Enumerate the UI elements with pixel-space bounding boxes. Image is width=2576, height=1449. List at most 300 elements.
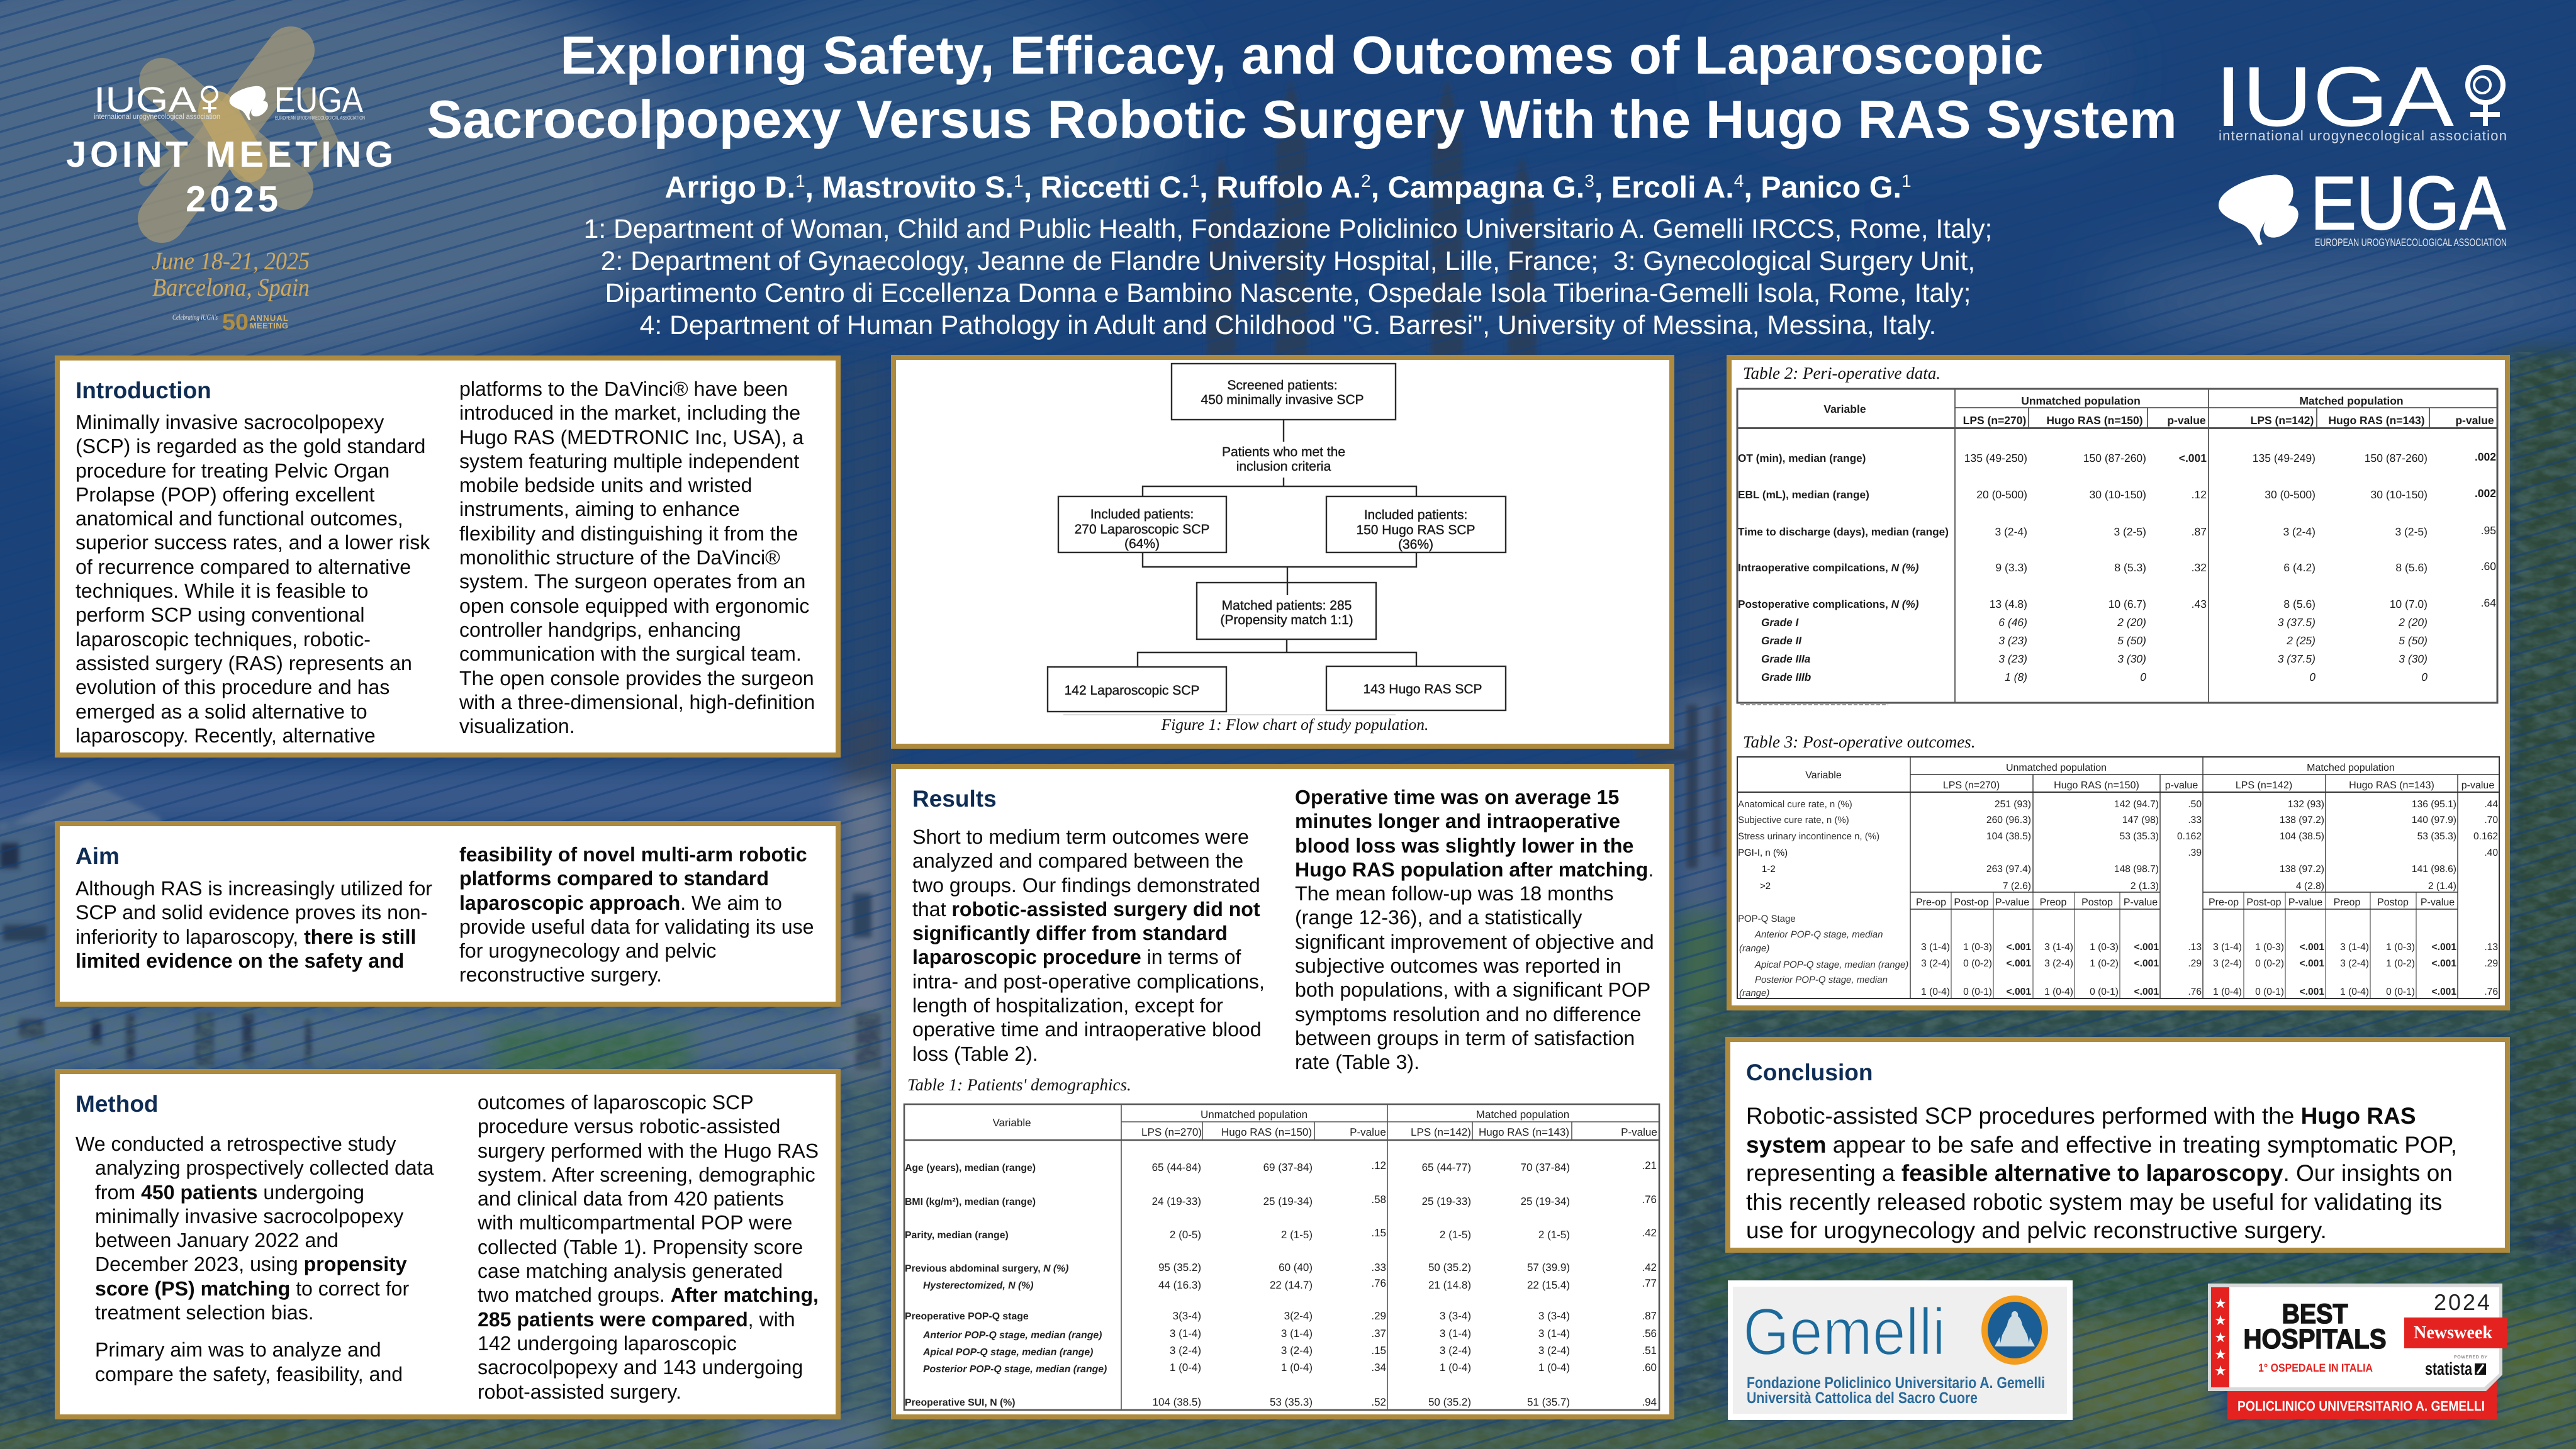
table 1: patients' demographics: .42: [1642, 1227, 1657, 1239]
text block: introduction column 1: anatomical and functional outcomes,: [76, 507, 403, 530]
badge heading: BEST: [2282, 1299, 2348, 1329]
table 1: patients' demographics: 65 (44-84): [1152, 1161, 1201, 1173]
table 1: patients' demographics: Posterior POP-Q stage, median (range): [923, 1364, 1107, 1375]
text block: results column 2: (range 12-36), and a statistically: [1295, 906, 1582, 929]
table 3: post-operative outcomes: 1 (0-4): [2044, 987, 2073, 997]
hospital name band text: POLICLINICO UNIVERSITARIO A. GEMELLI: [2237, 1398, 2485, 1414]
text block: aim column 1: SCP and solid evidence proves its non-: [76, 901, 427, 924]
text block: introduction column 1: Minimally invasive sacrocolpopexy: [76, 411, 384, 434]
text block: introduction column 1: of recurrence compared to alternative: [76, 556, 411, 578]
table 3: post-operative outcomes: .39: [2188, 848, 2202, 858]
table 1: patients' demographics: Unmatched population: [1201, 1109, 1308, 1121]
table 1: patients' demographics: 3 (3-4): [1440, 1310, 1471, 1322]
panel: conclusion: [1725, 1037, 2510, 1253]
table 2: peri-operative data: 135 (49-249): [2253, 452, 2316, 464]
statista mark: POWERED BY: [2454, 1355, 2487, 1360]
text block: method column 1: [76, 1133, 434, 1385]
text block: conclusion: this recently released robotic system may be useful for validating its: [1746, 1189, 2442, 1214]
IUGA EUGA joint meeting logo: [66, 26, 393, 335]
flow chart of study population: Matched patients: 285: [1222, 598, 1352, 613]
heading: aim: Aim: [76, 843, 120, 869]
title: Exploring Safety, Efficacy, and Outcomes of Laparoscopic: [560, 26, 2044, 86]
table 3: post-operative outcomes: Anatomical cure rate, n (%): [1738, 799, 1852, 810]
panel: introduction: [55, 355, 841, 758]
table 1: patients' demographics: 22 (14.7): [1270, 1279, 1313, 1291]
text block: introduction column 2: flexibility and distinguishing it from the: [459, 522, 798, 545]
table 1: patients' demographics: 24 (19-33): [1152, 1195, 1201, 1207]
table 2: peri-operative data: Unmatched population: [2021, 394, 2141, 407]
table 2: peri-operative data: Hugo RAS (n=150): [2046, 414, 2143, 427]
table 2: peri-operative data: 0: [2140, 671, 2146, 683]
table 2: peri-operative data: .64: [2481, 596, 2496, 609]
table 1: patients' demographics: 25 (19-34): [1521, 1195, 1570, 1207]
table 3: post-operative outcomes: [1737, 732, 2499, 999]
table 3: post-operative outcomes: Hugo RAS (n=143): [2349, 780, 2434, 791]
text block: method column 2: robot-assisted surgery.: [478, 1380, 681, 1403]
table 2: peri-operative data: p-value: [2167, 414, 2206, 427]
text block: introduction column 2: mobile bedside units and wristed: [459, 474, 752, 496]
text block: aim column 2: for urogynecology and pelvic: [459, 939, 716, 962]
table 3: post-operative outcomes: 0 (0-1): [1963, 987, 1992, 997]
table 1: patients' demographics: 70 (37-84): [1521, 1161, 1570, 1173]
table 1: patients' demographics: 3 (1-4): [1440, 1328, 1471, 1340]
table 2: peri-operative data: 20 (0-500): [1976, 488, 2027, 501]
panel: method: [55, 1069, 841, 1419]
50th annual meeting mark: Celebrating IUGA's: [172, 313, 218, 322]
text block: introduction column 1: emerged as a solid alternative to: [76, 700, 367, 723]
table 2: peri-operative data: 150 (87-260): [2083, 452, 2146, 464]
table 2: peri-operative data: 2 (25): [2286, 634, 2316, 647]
table 2: peri-operative data: p-value: [2455, 414, 2494, 427]
table 1: patients' demographics: Hysterectomized, N (%): [923, 1280, 1034, 1291]
table 1: patients' demographics: 3 (1-4): [1170, 1328, 1201, 1340]
table 2: peri-operative data: 3 (23): [1998, 634, 2027, 647]
text block: results column 2: significant improvement of objective and: [1295, 931, 1654, 953]
text block: method column 1: between January 2022 and: [95, 1229, 339, 1251]
text block: method column 1: compare the safety, feasibility, and: [95, 1363, 403, 1385]
table 3: post-operative outcomes: .13: [2484, 942, 2498, 953]
50th annual meeting mark: MEETING: [250, 321, 288, 330]
table 2: peri-operative data: Intraoperative compilcations, N (%): [1738, 561, 1919, 574]
table 2 caption: Table 2: Peri-operative data.: [1743, 364, 1940, 383]
table 2: peri-operative data: 3 (37.5): [2278, 616, 2316, 629]
text block: introduction column 2: Hugo RAS (MEDTRONIC Inc, USA), a: [459, 426, 804, 449]
table 1: patients' demographics: 2 (1-5): [1538, 1229, 1570, 1241]
text block: method column 2: collected (Table 1). Propensity score: [478, 1236, 803, 1258]
icon: stars: ★: [2214, 1295, 2227, 1311]
small EUGA logo: EUGA: [274, 80, 363, 120]
table 1: patients' demographics: 50 (35.2): [1428, 1396, 1471, 1408]
icon: stars: ★: [2214, 1363, 2227, 1379]
table 1: patients' demographics: 3 (1-4): [1281, 1328, 1313, 1340]
text block: aim column 2: [459, 843, 814, 986]
table 3: post-operative outcomes: <.001: [2134, 958, 2159, 969]
table 3: post-operative outcomes: Variable: [1805, 770, 1842, 781]
table 1: patients' demographics: BMI (kg/m²), median (range): [905, 1197, 1036, 1207]
table 3: post-operative outcomes: 1 (0-3): [2255, 942, 2284, 953]
table 1: patients' demographics: .34: [1371, 1362, 1386, 1373]
text block: introduction column 1: [76, 411, 430, 747]
logo: Gemelli foundation: [1728, 1280, 2073, 1420]
affiliations: 4: Department of Human Pathology in Adult and Childhood "G. Barresi", University of Messina, Messina, Italy.: [640, 310, 1936, 340]
table 1: patients' demographics: .77: [1642, 1277, 1657, 1289]
badge: Newsweek best hospitals 2024: [2202, 1277, 2513, 1426]
table 2: peri-operative data: EBL (mL), median (range): [1738, 488, 1869, 501]
text block: introduction column 1: superior success rates, and a lower risk: [76, 531, 430, 554]
table 3: post-operative outcomes: 3 (1-4): [1921, 942, 1950, 953]
table 1: patients' demographics: 25 (19-33): [1422, 1195, 1471, 1207]
text block: results column 1: operative time and intraoperative blood: [912, 1018, 1262, 1041]
table 3: post-operative outcomes: 2 (1.3): [2131, 881, 2159, 892]
table 1: patients' demographics: 3 (2-4): [1440, 1345, 1471, 1357]
text block: results column 2: rate (Table 3).: [1295, 1051, 1420, 1073]
table 1: patients' demographics: 1 (0-4): [1170, 1362, 1201, 1373]
meeting name: JOINT MEETING: [66, 134, 393, 175]
table 3: post-operative outcomes: 104 (38.5): [1986, 831, 2031, 842]
table 1: patients' demographics: .56: [1642, 1328, 1657, 1340]
flow chart of study population: [1047, 362, 1506, 734]
text block: method column 1: analyzing prospectively collected data: [95, 1156, 434, 1179]
table 1: patients' demographics: .76: [1642, 1194, 1657, 1206]
flow chart of study population: (36%): [1398, 537, 1433, 552]
IUGA logo top right: international urogynecological association: [2219, 128, 2507, 143]
table 1: patients' demographics: .15: [1371, 1227, 1386, 1239]
table 2: peri-operative data: Grade II: [1761, 634, 1802, 647]
table 3: post-operative outcomes: <.001: [2432, 958, 2456, 969]
badge heading: 1° OSPEDALE IN ITALIA: [2258, 1362, 2373, 1374]
table 3: post-operative outcomes: 104 (38.5): [2280, 831, 2324, 842]
text block: results column 1: two groups. Our findings demonstrated: [912, 874, 1260, 897]
table 1: patients' demographics: .33: [1371, 1262, 1386, 1273]
text block: aim column 2: reconstructive surgery.: [459, 963, 662, 986]
text block: method column 2: 285 patients were compared, with: [478, 1308, 795, 1331]
statista mark: statista: [2425, 1359, 2472, 1379]
table 1: patients' demographics: 1 (0-4): [1281, 1362, 1313, 1373]
table 1: patients' demographics: 104 (38.5): [1153, 1396, 1201, 1408]
table 3: post-operative outcomes: 141 (98.6): [2412, 864, 2456, 875]
text block: results column 1: intra- and post-operative complications,: [912, 970, 1265, 993]
flow chart of study population: Included patients:: [1090, 507, 1194, 522]
table 3: post-operative outcomes: LPS (n=270): [1943, 780, 2000, 791]
affiliations: [584, 214, 1992, 340]
table 2: peri-operative data: Grade IIIb: [1761, 671, 1811, 683]
table 2: peri-operative data: 30 (0-500): [2265, 488, 2316, 501]
table 1: patients' demographics: Age (years), median (range): [905, 1163, 1036, 1173]
IUGA logo top right: IUGA: [2215, 50, 2454, 144]
flow chart of study population: 150 Hugo RAS SCP: [1356, 523, 1476, 537]
table 3: post-operative outcomes: <.001: [2134, 987, 2159, 997]
Newsweek label: [2404, 1318, 2507, 1348]
table 2: peri-operative data: 3 (30): [2117, 652, 2146, 665]
table 2: peri-operative data: 8 (5.6): [2395, 561, 2428, 574]
text block: method column 2: [478, 1091, 819, 1403]
text block: results column 2: [1295, 785, 1654, 1075]
text block: method column 2: case matching analysis generated: [478, 1260, 783, 1282]
text block: introduction column 2: instruments, aiming to enhance: [459, 498, 740, 520]
text block: aim column 1: inferiority to laparoscopy, there is still: [76, 926, 416, 948]
flow chart of study population: Screened patients:: [1227, 378, 1338, 393]
heading: conclusion: Conclusion: [1746, 1060, 1873, 1085]
text block: results column 1: significantly differ from standard: [912, 922, 1228, 944]
table 1: patients' demographics: 2 (1-5): [1281, 1229, 1313, 1241]
table 1: patients' demographics: 3(3-4): [1173, 1310, 1201, 1322]
table 1: patients' demographics: 22 (15.4): [1527, 1279, 1570, 1291]
flow chart of study population: Patients who met the: [1222, 445, 1345, 459]
text block: method column 2: and clinical data from 420 patients: [478, 1187, 784, 1210]
table 3: post-operative outcomes: <.001: [2432, 987, 2456, 997]
text block: introduction column 2: [459, 378, 815, 737]
table 1: patients' demographics: 25 (19-34): [1263, 1195, 1313, 1207]
table 1: patients' demographics: P-value: [1621, 1126, 1657, 1138]
table 3: post-operative outcomes: P-value: [2421, 897, 2455, 908]
table 3: post-operative outcomes: 251 (93): [1995, 799, 2031, 810]
badge heading: HOSPITALS: [2244, 1324, 2386, 1355]
table 1: patients' demographics: .87: [1642, 1310, 1657, 1322]
text block: method column 2: two matched groups. After matching,: [478, 1284, 819, 1306]
text block: introduction column 1: assisted surgery (RAS) represents an: [76, 652, 412, 674]
table 1: patients' demographics: 3 (2-4): [1170, 1345, 1201, 1357]
table 1: patients' demographics: 2 (0-5): [1170, 1229, 1201, 1241]
text block: introduction column 2: controller handgrips, enhancing: [459, 618, 741, 641]
IUGA logo top right: [2215, 50, 2507, 249]
text block: conclusion: [1746, 1102, 2457, 1245]
panel: results: [891, 764, 1674, 1419]
table 3: post-operative outcomes: 3 (1-4): [2340, 942, 2369, 953]
small IUGA logo: international urogynecological association: [94, 112, 220, 121]
table 3: post-operative outcomes: 0 (0-1): [2255, 987, 2284, 997]
text block: results column 1: loss (Table 2).: [912, 1043, 1038, 1065]
table 3: post-operative outcomes: 260 (96.3): [1986, 815, 2031, 825]
Newsweek label: Newsweek: [2414, 1323, 2493, 1343]
table 3: post-operative outcomes: .50: [2188, 799, 2202, 810]
text block: method column 1: treatment selection bias. Primary aim was to analyze and: [95, 1301, 381, 1361]
table 3: post-operative outcomes: <.001: [2300, 958, 2324, 969]
table 2: peri-operative data: 1 (8): [2005, 671, 2027, 683]
table 2: peri-operative data: 5 (50): [2117, 634, 2146, 647]
icon: stars: ★: [2214, 1312, 2227, 1328]
foundation name: Università Cattolica del Sacro Cuore: [1747, 1389, 1978, 1407]
table 3: post-operative outcomes: Matched population: [2307, 763, 2395, 773]
table 1: patients' demographics: LPS (n=270): [1141, 1126, 1202, 1138]
table 1: patients' demographics: 50 (35.2): [1428, 1262, 1471, 1273]
small IUGA logo: [94, 80, 220, 121]
flow chart of study population: Included patients:: [1364, 508, 1467, 522]
table 3: post-operative outcomes: Postop: [2081, 897, 2113, 908]
table 2: peri-operative data: 6 (46): [1998, 616, 2027, 629]
table 1: patients' demographics: 51 (35.7): [1527, 1396, 1570, 1408]
table 1: patients' demographics: P-value: [1350, 1126, 1386, 1138]
table 2: peri-operative data: 8 (5.6): [2283, 598, 2316, 610]
table 2: peri-operative data: 3 (2-4): [1995, 525, 2027, 538]
table 2: peri-operative data: Hugo RAS (n=143): [2328, 414, 2425, 427]
title: [427, 26, 2177, 150]
text block: introduction column 1: perform SCP using conventional: [76, 603, 364, 626]
table 3: post-operative outcomes: 147 (98): [2122, 815, 2159, 825]
text block: results column 1: Short to medium term outcomes were: [912, 825, 1249, 848]
table 1: patients' demographics: .51: [1642, 1345, 1657, 1357]
text block: results column 2: Hugo RAS population after matching.: [1295, 858, 1654, 881]
table 3: post-operative outcomes: Unmatched population: [2006, 763, 2107, 773]
text block: introduction column 1: laparoscopy. Recently, alternative: [76, 724, 376, 747]
table 3: post-operative outcomes: 1 (0-3): [1963, 942, 1992, 953]
panel: tables 2 and 3: [1727, 355, 2510, 1010]
text block: method column 2: 142 undergoing laparoscopic: [478, 1332, 737, 1355]
text block: introduction column 2: communication with the surgical team.: [459, 642, 802, 665]
50th annual meeting mark: [172, 309, 288, 335]
table 3: post-operative outcomes: Post-op: [2246, 897, 2282, 908]
table 3: post-operative outcomes: 0 (0-2): [2255, 958, 2284, 969]
text block: introduction column 2: The open console provides the surgeon: [459, 667, 814, 690]
table 2: peri-operative data: Grade I: [1761, 616, 1799, 629]
table 3: post-operative outcomes: .29: [2484, 958, 2498, 969]
text block: method column 1: from 450 patients undergoing: [95, 1181, 364, 1204]
table 1: patients' demographics: .94: [1642, 1396, 1657, 1408]
text block: results column 1: [912, 825, 1265, 1066]
table 1: patients' demographics: 69 (37-84): [1263, 1161, 1313, 1173]
text block: results column 2: Operative time was on average 15: [1295, 786, 1619, 808]
table 1: patients' demographics: Preoperative POP-Q stage: [905, 1311, 1029, 1322]
icon: stars: [2214, 1295, 2227, 1379]
table 2: peri-operative data: 135 (49-250): [1964, 452, 2027, 464]
table 2: peri-operative data: .87: [2192, 525, 2207, 538]
foundation name: [1747, 1374, 2045, 1407]
table 3: post-operative outcomes: 138 (97.2): [2280, 864, 2324, 875]
table 3: post-operative outcomes: 1 (0-2): [2386, 958, 2415, 969]
table 1: patients' demographics: 44 (16.3): [1158, 1279, 1201, 1291]
text block: introduction column 1: evolution of this procedure and has: [76, 676, 389, 698]
table 3: post-operative outcomes: >2: [1760, 881, 1771, 892]
table 1: patients' demographics: .60: [1642, 1362, 1657, 1373]
text block: conclusion: representing a feasible alternative to laparoscopy. Our insights on: [1746, 1160, 2453, 1186]
table 1: patients' demographics: 3 (3-4): [1538, 1310, 1570, 1322]
table 3: post-operative outcomes: Preop: [2040, 897, 2066, 908]
text block: aim column 2: feasibility of novel multi-arm robotic: [459, 843, 807, 866]
table 3: post-operative outcomes: 3 (1-4): [2044, 942, 2073, 953]
table 3: post-operative outcomes: 142 (94.7): [2114, 799, 2159, 810]
table 2: peri-operative data: 0: [2421, 671, 2428, 683]
text block: introduction column 2: platforms to the DaVinci® have been: [459, 378, 788, 400]
EUGA logo top right: EUGA: [2310, 161, 2506, 245]
table 3: post-operative outcomes: <.001: [2007, 987, 2031, 997]
affiliations: 1: Department of Woman, Child and Public Health, Fondazione Policlinico Universitario A. Gemelli IRCCS, Rome, Italy;: [584, 214, 1992, 244]
table 2: peri-operative data: 3 (2-5): [2395, 525, 2428, 538]
table 3: post-operative outcomes: .40: [2484, 848, 2498, 858]
table 2: peri-operative data: 3 (23): [1998, 652, 2027, 665]
table 3: post-operative outcomes: 2 (1.4): [2428, 881, 2456, 892]
table 2: peri-operative data: 10 (6.7): [2108, 598, 2146, 610]
text block: results column 2: subjective outcomes was reported in: [1295, 954, 1621, 977]
small EUGA logo: [230, 80, 365, 121]
table 2: peri-operative data: Matched population: [2299, 394, 2404, 407]
authors: Arrigo D.1, Mastrovito S.1, Riccetti C.1, Ruffolo A.2, Campagna G.3, Ercoli A.4, Panico G.1: [664, 171, 1912, 204]
small IUGA logo: IUGA: [94, 80, 196, 120]
table 3: post-operative outcomes: Subjective cure rate, n (%): [1738, 815, 1849, 825]
text block: aim column 2: platforms compared to standard: [459, 867, 769, 890]
title: Sacrocolpopexy Versus Robotic Surgery With the Hugo RAS System: [427, 90, 2177, 150]
table 2: peri-operative data: .002: [2475, 450, 2496, 463]
table 3: post-operative outcomes: 7 (2.6): [2003, 881, 2031, 892]
text block: results column 1: length of hospitalization, except for: [912, 994, 1223, 1017]
table 3: post-operative outcomes: <.001: [2007, 942, 2031, 953]
table 1: patients' demographics: .42: [1642, 1262, 1657, 1273]
table 2: peri-operative data: 2 (20): [2398, 616, 2428, 629]
text block: introduction column 2: system featuring multiple independent: [459, 450, 799, 473]
table 3: post-operative outcomes: <.001: [2134, 942, 2159, 953]
meeting date and place: Barcelona, Spain: [152, 273, 310, 301]
table 1: patients' demographics: 3 (1-4): [1538, 1328, 1570, 1340]
flow chart of study population: 142 Laparoscopic SCP: [1065, 683, 1199, 698]
table 2: peri-operative data: 0: [2309, 671, 2316, 683]
table 1: patients' demographics: .58: [1371, 1194, 1386, 1206]
table 1: patients' demographics: .21: [1642, 1160, 1657, 1172]
table 3: post-operative outcomes: 1-2: [1762, 864, 1776, 875]
text block: introduction column 1: techniques. While it is feasible to: [76, 579, 368, 602]
text block: method column 2: procedure versus robotic-assisted: [478, 1115, 780, 1138]
table 2: peri-operative data: 3 (30): [2399, 652, 2428, 665]
flow chart of study population: (Propensity match 1:1): [1220, 613, 1353, 627]
table 1: patients' demographics: Apical POP-Q stage, median (range): [922, 1347, 1093, 1358]
table 3: post-operative outcomes: <.001: [2432, 942, 2456, 953]
affiliations: 2: Department of Gynaecology, Jeanne de Flandre University Hospital, Lille, France; 3: Gynecological Surgery Unit,: [601, 246, 1975, 276]
table 3: post-operative outcomes: 53 (35.3): [2120, 831, 2159, 842]
table 2: peri-operative data: 150 (87-260): [2365, 452, 2428, 464]
table 1: patients' demographics: Anterior POP-Q stage, median (range): [922, 1330, 1102, 1341]
table 3: post-operative outcomes: 3 (2-4): [1921, 958, 1950, 969]
table 3: post-operative outcomes: <.001: [2300, 942, 2324, 953]
table 3: post-operative outcomes: 136 (95.1): [2412, 799, 2456, 810]
table 1: patients' demographics: Preoperative SUI, N (%): [905, 1397, 1016, 1408]
table 3: post-operative outcomes: POP-Q Stage: [1738, 914, 1796, 924]
table 1: patients' demographics: Variable: [992, 1117, 1031, 1129]
table 3: post-operative outcomes: 3 (1-4): [2213, 942, 2242, 953]
text block: results column 1: that robotic-assisted surgery did not: [912, 898, 1260, 920]
EUGA logo top right: EUROPEAN UROGYNAECOLOGICAL ASSOCIATION: [2315, 237, 2507, 249]
text block: method column 2: sacrocolpopexy and 143 undergoing: [478, 1356, 803, 1379]
panel: aim: [55, 821, 841, 1007]
table 1: patients' demographics: 21 (14.8): [1428, 1279, 1471, 1291]
heading: introduction: Introduction: [76, 378, 211, 403]
flow chart of study population: 143 Hugo RAS SCP: [1363, 682, 1482, 697]
meeting name: 2025: [186, 179, 278, 220]
table 3: post-operative outcomes: 0.162: [2473, 831, 2498, 842]
table 2: peri-operative data: .32: [2192, 561, 2207, 574]
table 1: patients' demographics: 53 (35.3): [1270, 1396, 1313, 1408]
panel: flow chart figure: [891, 355, 1674, 749]
badge heading: [2244, 1299, 2386, 1374]
heading: method: Method: [76, 1091, 159, 1117]
table 3: post-operative outcomes: 1 (0-4): [1921, 987, 1950, 997]
text block: results column 1: analyzed and compared between the: [912, 849, 1243, 872]
table 1: patients' demographics: 2 (1-5): [1440, 1229, 1471, 1241]
table 3: post-operative outcomes: 1 (0-3): [2386, 942, 2415, 953]
table 2: peri-operative data: 6 (4.2): [2283, 561, 2316, 574]
table 3: post-operative outcomes: 3 (2-4): [2044, 958, 2073, 969]
table 3: post-operative outcomes: Pre-op: [2209, 897, 2239, 908]
table 3: post-operative outcomes: 0 (0-2): [1963, 958, 1992, 969]
table 3: post-operative outcomes: Hugo RAS (n=150): [2054, 780, 2139, 791]
table 3: post-operative outcomes: 53 (35.3): [2417, 831, 2456, 842]
text block: results column 2: symptoms resolution and no difference: [1295, 1003, 1641, 1026]
table 2: peri-operative data: 8 (5.3): [2114, 561, 2146, 574]
table 1: patients' demographics: .37: [1371, 1328, 1386, 1340]
text block: aim column 1: Although RAS is increasingly utilized for: [76, 877, 432, 900]
table 3: post-operative outcomes: Postop: [2377, 897, 2409, 908]
50th annual meeting mark: 50: [222, 309, 249, 335]
table 3: post-operative outcomes: .29: [2188, 958, 2202, 969]
table 3: post-operative outcomes: .70: [2484, 815, 2498, 825]
table 2: peri-operative data: .60: [2481, 560, 2496, 573]
text block: aim column 1: limited evidence on the safety and: [76, 949, 404, 972]
